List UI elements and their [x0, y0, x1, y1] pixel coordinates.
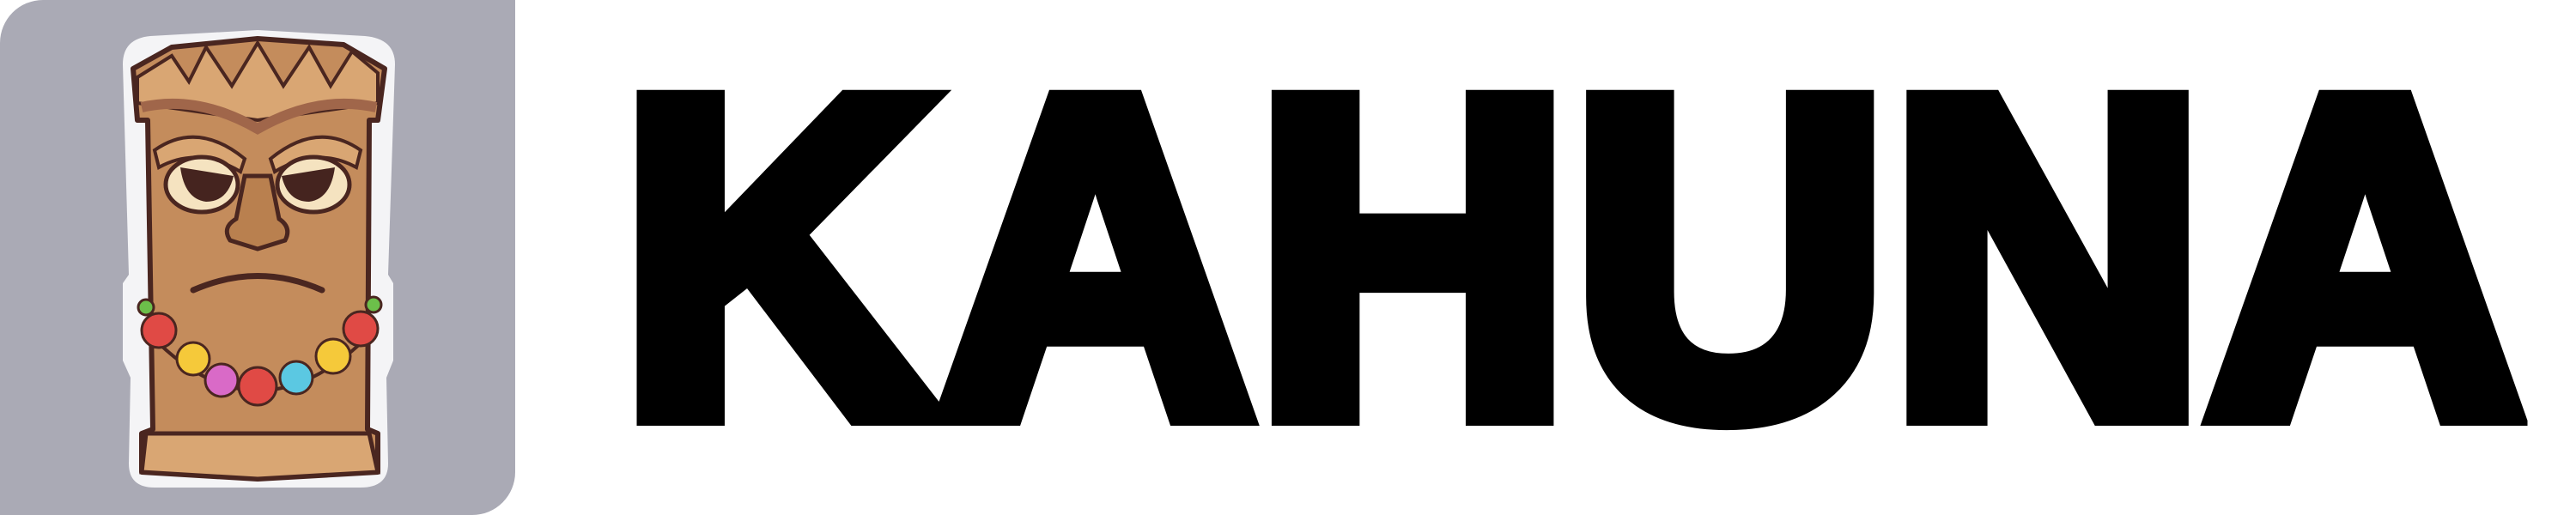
icon: tiki mask: [123, 30, 395, 488]
panel: logo background: [0, 0, 515, 515]
title: KAHUNA: KAHUNA: [620, 6, 2524, 509]
